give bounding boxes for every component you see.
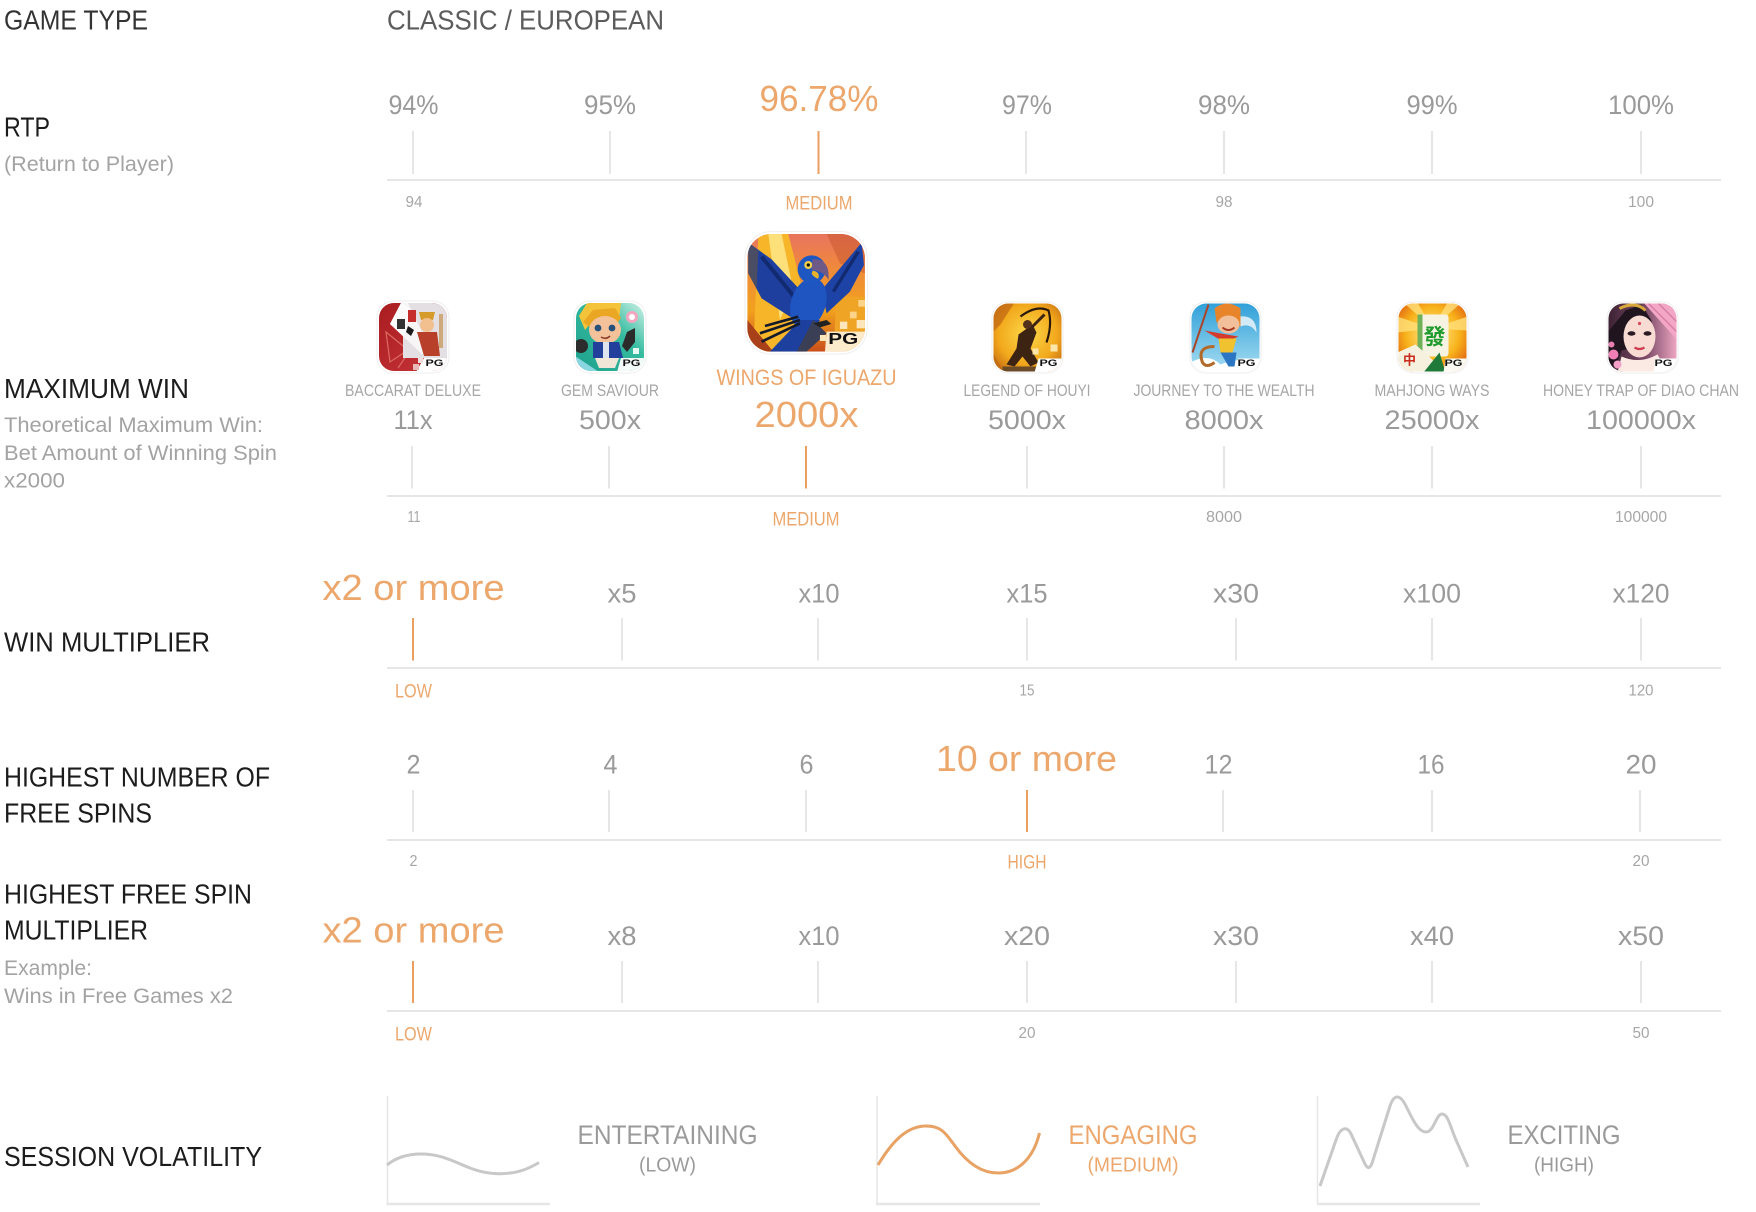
label: entertaining low: [578, 1120, 758, 1176]
free spin count axis captions: HIGH: [1008, 852, 1046, 874]
RTP scale values: 99%: [1406, 90, 1458, 120]
icon: baccarat deluxe: PG: [426, 358, 444, 369]
heading: highest free spin multiplier: MULTIPLIER: [4, 914, 148, 946]
free spin multiplier values: x40: [1410, 921, 1454, 951]
win multiplier values: x5: [608, 578, 636, 608]
game names: MAHJONG WAYS: [1374, 382, 1490, 400]
label: engaging medium: [1068, 1120, 1198, 1176]
game names: LEGEND OF HOUYI: [964, 382, 1090, 400]
icon: journey to the wealth: [1190, 302, 1261, 373]
RTP scale values: [388, 90, 1674, 120]
RTP scale values: 100%: [1608, 90, 1674, 120]
icon: legend of houyi: [992, 302, 1063, 373]
maximum win axis captions: 100000: [1615, 509, 1667, 526]
RTP scale values: 94%: [388, 90, 438, 120]
game names: [345, 382, 1739, 400]
icon: honey trap of diao chan: [1607, 302, 1678, 373]
free spin count values: 20: [1626, 750, 1656, 780]
game names: JOURNEY TO THE WEALTH: [1134, 382, 1314, 400]
chart: medium volatility curve: [876, 1096, 1040, 1204]
icon: mahjong ways: 發: [1423, 320, 1446, 352]
RTP scale values: 95%: [584, 90, 636, 120]
free spin multiplier axis captions: 50: [1632, 1025, 1650, 1042]
win multiplier values: x120: [1612, 578, 1670, 608]
win multiplier axis captions: 15: [1020, 682, 1034, 700]
panel: win multiplier row: [4, 567, 1721, 702]
heading: highest free spin multiplier: HIGHEST FREE SPIN: [4, 878, 252, 910]
subheading: return to player: (Return to Player): [4, 153, 174, 176]
free spin count values: [406, 750, 1656, 780]
icon: gem saviour: PG: [622, 358, 640, 369]
icon: baccarat deluxe: [377, 301, 449, 373]
free spin count axis captions: [410, 852, 1650, 874]
description: theoretical maximum win: Theoretical Maximum Win:: [4, 414, 263, 437]
free spin count axis captions: 20: [1632, 853, 1650, 870]
icon: honey trap of diao chan: PG: [1654, 358, 1672, 369]
free spin multiplier values: [608, 921, 1664, 951]
RTP axis captions: 100: [1628, 194, 1654, 211]
icon: journey to the wealth: PG: [1238, 358, 1256, 369]
free spin count axis: [387, 790, 1721, 840]
win multiplier values: x15: [1006, 578, 1048, 608]
icon: wings of iguazu: PG: [828, 331, 858, 348]
free spin multiplier axis captions: [395, 1024, 1650, 1046]
heading: highest number of free spins: FREE SPINS: [4, 798, 152, 828]
panel: highest free spin multiplier row: [4, 878, 1721, 1046]
free spin count values: 4: [604, 750, 618, 780]
description: example: Example:: [4, 957, 92, 980]
highlighted RTP value: 96.78%: [760, 78, 878, 119]
win multiplier values: x10: [798, 578, 840, 608]
heading: maximum win: MAXIMUM WIN: [4, 373, 189, 404]
win multiplier values: x100: [1403, 578, 1461, 608]
highlighted win multiplier: x2 or more: [322, 567, 504, 608]
free spin count axis captions: 2: [410, 853, 418, 870]
description: theoretical maximum win: Bet Amount of Winning Spin: [4, 442, 277, 465]
icon: mahjong ways: [1397, 302, 1468, 373]
free spin multiplier values: x30: [1213, 921, 1259, 951]
free spin count values: 16: [1418, 750, 1444, 780]
heading: win multiplier: WIN MULTIPLIER: [4, 626, 210, 658]
label: entertaining low: ENTERTAINING: [578, 1120, 758, 1150]
maximum win values: 11x: [394, 405, 433, 435]
game names: BACCARAT DELUXE: [345, 382, 481, 400]
free spin multiplier axis captions: LOW: [395, 1024, 432, 1046]
win multiplier axis captions: 120: [1628, 682, 1654, 700]
RTP scale axis: [387, 131, 1721, 180]
maximum win values: [394, 405, 1697, 435]
panel: maximum win row: [4, 232, 1739, 530]
icon: mahjong ways: 中: [1403, 350, 1416, 368]
RTP axis captions: MEDIUM: [786, 194, 852, 214]
maximum win values: 100000x: [1586, 405, 1697, 435]
heading: game type: GAME TYPE: [4, 4, 148, 36]
heading: RTP: RTP: [4, 112, 50, 142]
icon: mahjong ways: PG: [1444, 358, 1462, 369]
value: classic / european: CLASSIC / EUROPEAN: [387, 4, 664, 36]
description: example: Wins in Free Games x2: [4, 985, 233, 1008]
heading: session volatility: SESSION VOLATILITY: [4, 1141, 262, 1172]
description: theoretical maximum win: [4, 414, 277, 492]
maximum win values: 8000x: [1184, 405, 1264, 435]
label: engaging medium: (MEDIUM): [1088, 1154, 1178, 1176]
chart: low volatility curve: [386, 1096, 550, 1204]
highlighted free spin count: 10 or more: [936, 738, 1117, 779]
game names: GEM SAVIOUR: [561, 382, 659, 400]
highlighted maximum win: 2000x: [754, 394, 858, 435]
maximum win axis captions: 11: [408, 509, 420, 526]
free spin multiplier axis: [387, 961, 1721, 1011]
highlighted game name: WINGS OF IGUAZU: [716, 365, 896, 390]
maximum win values: 25000x: [1384, 405, 1480, 435]
label: exciting high: EXCITING: [1508, 1120, 1620, 1150]
free spin multiplier values: x50: [1618, 921, 1664, 951]
win multiplier axis: [387, 618, 1721, 668]
panel: session volatility row: [4, 1096, 1620, 1204]
maximum win values: 500x: [579, 405, 642, 435]
icon: wings of iguazu: [745, 232, 867, 354]
label: exciting high: (HIGH): [1534, 1154, 1594, 1176]
icon: legend of houyi: PG: [1040, 358, 1058, 369]
icon: gem saviour: [574, 301, 646, 373]
maximum win values: 5000x: [988, 405, 1067, 435]
panel: highest number of free spins row: [4, 738, 1721, 874]
free spin multiplier values: x8: [608, 921, 636, 951]
free spin multiplier values: x20: [1004, 921, 1050, 951]
chart: high volatility curve: [1317, 1096, 1480, 1204]
maximum win axis captions: [408, 509, 1667, 530]
maximum win axis: [387, 446, 1721, 496]
label: engaging medium: ENGAGING: [1068, 1120, 1198, 1150]
description: example: [4, 957, 233, 1008]
free spin count values: 6: [800, 750, 814, 780]
win multiplier values: [608, 578, 1670, 608]
RTP axis captions: [406, 194, 1654, 214]
free spin count values: 2: [406, 750, 420, 780]
panel: RTP row: [4, 78, 1721, 214]
win multiplier axis captions: LOW: [395, 682, 432, 702]
RTP axis captions: 98: [1216, 194, 1232, 211]
win multiplier values: x30: [1213, 578, 1259, 608]
panel: game type row: [4, 4, 664, 36]
heading: highest number of free spins: [4, 762, 270, 828]
maximum win axis captions: 8000: [1206, 509, 1242, 526]
label: exciting high: [1508, 1120, 1620, 1176]
win multiplier axis captions: [395, 682, 1654, 702]
maximum win axis captions: MEDIUM: [772, 510, 840, 530]
RTP scale values: 98%: [1198, 90, 1250, 120]
label: entertaining low: (LOW): [639, 1154, 696, 1176]
description: theoretical maximum win: x2000: [4, 470, 65, 492]
highlighted free spin multiplier: x2 or more: [322, 910, 504, 950]
free spin count values: 12: [1204, 750, 1232, 780]
heading: highest free spin multiplier: [4, 878, 252, 946]
RTP scale values: 97%: [1002, 90, 1052, 120]
free spin multiplier values: x10: [798, 921, 840, 951]
free spin multiplier axis captions: 20: [1018, 1025, 1036, 1042]
RTP axis captions: 94: [406, 194, 423, 211]
heading: highest number of free spins: HIGHEST NUMBER OF: [4, 762, 270, 792]
